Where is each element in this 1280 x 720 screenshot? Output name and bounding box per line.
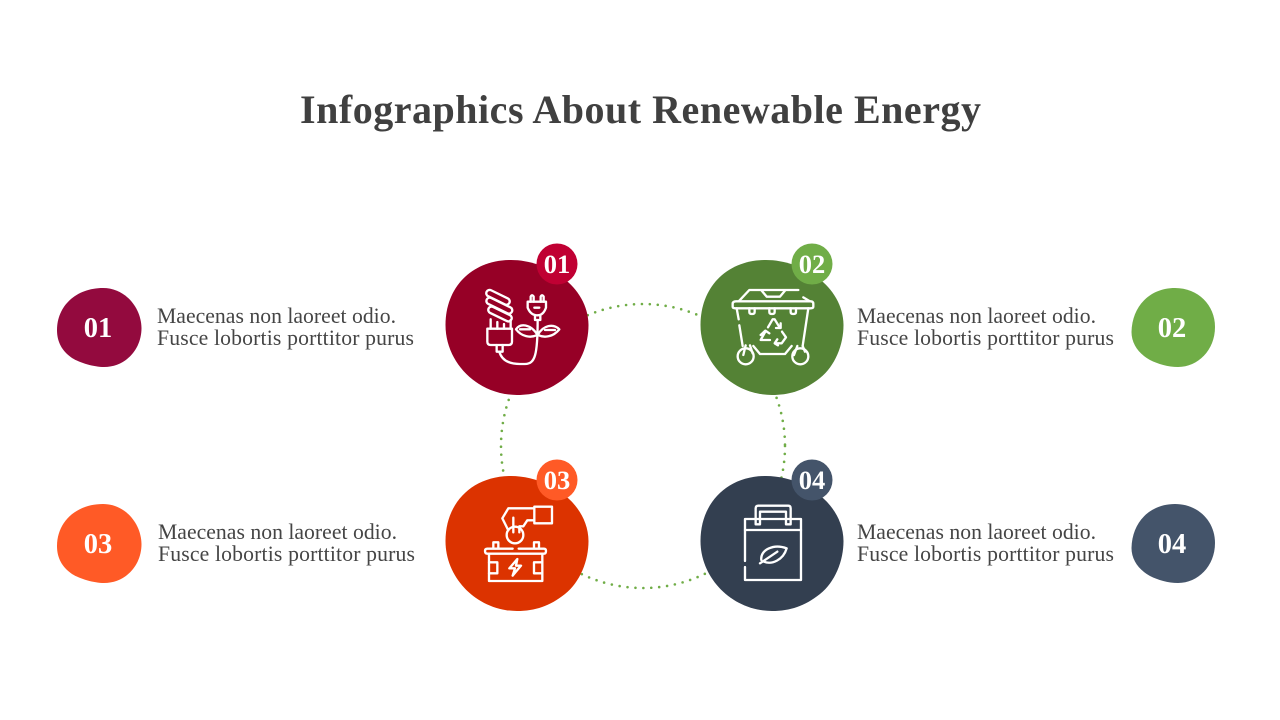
number 04: 04 bbox=[1158, 529, 1186, 560]
badge 03 bbox=[536, 460, 578, 500]
badge number 03: 03 bbox=[544, 465, 570, 495]
number 02: 02 bbox=[1158, 313, 1186, 344]
panel: step 01 bbox=[57, 244, 588, 395]
text block 04: Maecenas non laoreet odio. bbox=[857, 520, 1096, 544]
badge 04 bbox=[792, 460, 832, 500]
text block 02: Maecenas non laoreet odio. bbox=[857, 304, 1096, 328]
number blob 02 bbox=[1132, 288, 1215, 367]
icon: hand and battery bbox=[485, 507, 552, 581]
circle 03 bbox=[446, 476, 588, 611]
number 01: 01 bbox=[84, 313, 112, 344]
badge number 02: 02 bbox=[799, 249, 825, 279]
circle 02 bbox=[700, 260, 844, 395]
badge 02 bbox=[792, 244, 832, 284]
text block 01: Maecenas non laoreet odio. bbox=[157, 304, 396, 328]
title: Infographics About Renewable Energy bbox=[300, 87, 981, 132]
badge 01 bbox=[536, 244, 578, 284]
dotted ring connector bbox=[501, 304, 785, 588]
number 03: 03 bbox=[84, 529, 112, 560]
badge number 04: 04 bbox=[799, 465, 825, 495]
number blob 03 bbox=[57, 504, 142, 583]
text block 03: Fusce lobortis porttitor purus bbox=[158, 542, 415, 566]
text block 01: Fusce lobortis porttitor purus bbox=[157, 326, 414, 350]
circle 04 bbox=[700, 476, 844, 611]
panel: step 04 bbox=[700, 460, 1215, 611]
badge number 01: 01 bbox=[544, 249, 570, 279]
circle 01 bbox=[446, 260, 588, 395]
icon: recycling bin bbox=[733, 290, 813, 364]
text block 04: Fusce lobortis porttitor purus bbox=[857, 542, 1114, 566]
text block 03: Maecenas non laoreet odio. bbox=[158, 520, 397, 544]
panel: step 03 bbox=[57, 460, 588, 611]
icon: leaf bag bbox=[745, 506, 801, 580]
icon: bulb and plug bbox=[485, 289, 559, 364]
number blob 04 bbox=[1132, 504, 1215, 583]
text block 02: Fusce lobortis porttitor purus bbox=[857, 326, 1114, 350]
number blob 01 bbox=[57, 288, 142, 367]
panel: step 02 bbox=[700, 244, 1215, 395]
